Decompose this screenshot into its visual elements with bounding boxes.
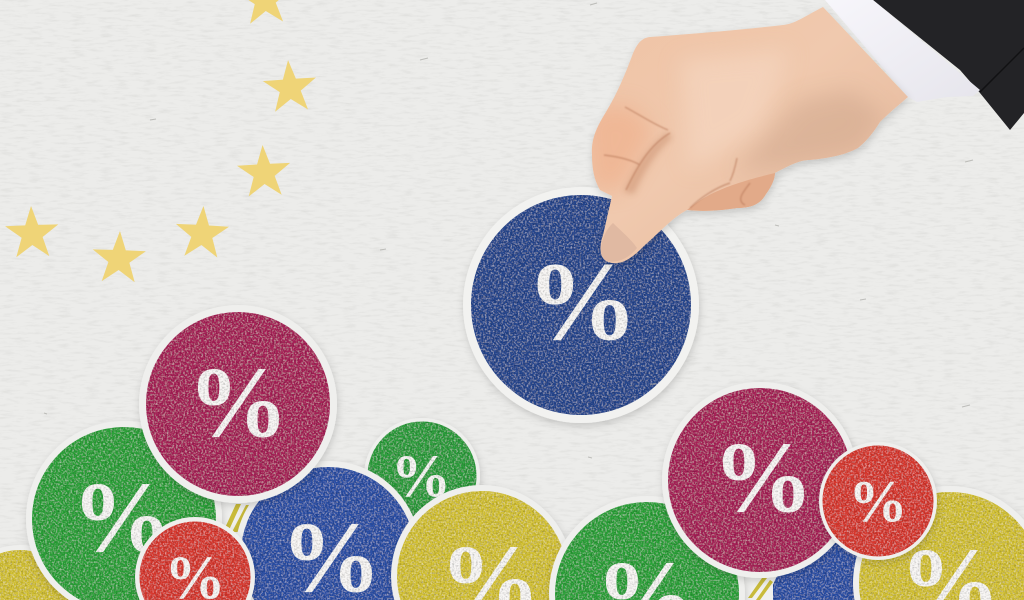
coin: small green: % xyxy=(391,443,451,509)
coin: magenta right xyxy=(662,382,858,578)
coin: blue main, held by hand xyxy=(463,187,699,423)
coin: magenta left: % xyxy=(188,346,288,458)
shirt cuff xyxy=(825,0,980,102)
coin: green left: % xyxy=(72,461,172,573)
jacket sleeve xyxy=(873,0,1024,130)
coin: green left xyxy=(26,421,222,600)
coin: blue right, partly hidden xyxy=(762,537,908,600)
coin stack detail: hidden yellow stripes, right xyxy=(745,576,773,600)
coin stack detail: hidden yellow stripes, left xyxy=(218,500,252,536)
coin: yellow right xyxy=(853,486,1024,600)
finger tips, pinker tone xyxy=(585,105,655,190)
coin: yellow middle xyxy=(391,485,573,600)
EU stars arc xyxy=(4,0,318,283)
coin: red left xyxy=(135,517,255,600)
coin: yellow far left xyxy=(0,545,87,600)
coin: blue left xyxy=(235,461,421,600)
paper specks xyxy=(44,3,973,458)
hand xyxy=(585,7,908,263)
coin: small green xyxy=(364,418,480,534)
shadow between fingers and thumb xyxy=(624,132,672,194)
finger creases xyxy=(604,107,750,208)
back of hand, soft highlight xyxy=(684,56,778,155)
coin: red right xyxy=(819,442,937,560)
coin: blue main, held by hand: % xyxy=(526,240,638,364)
lower fingers xyxy=(687,173,775,211)
back of hand, tendon shading xyxy=(750,92,878,170)
thumb nail xyxy=(601,223,637,262)
coin: green middle xyxy=(549,496,745,600)
coin: magenta left xyxy=(139,305,337,503)
coin: red right: % xyxy=(848,468,908,534)
coin: magenta right: % xyxy=(712,421,814,533)
